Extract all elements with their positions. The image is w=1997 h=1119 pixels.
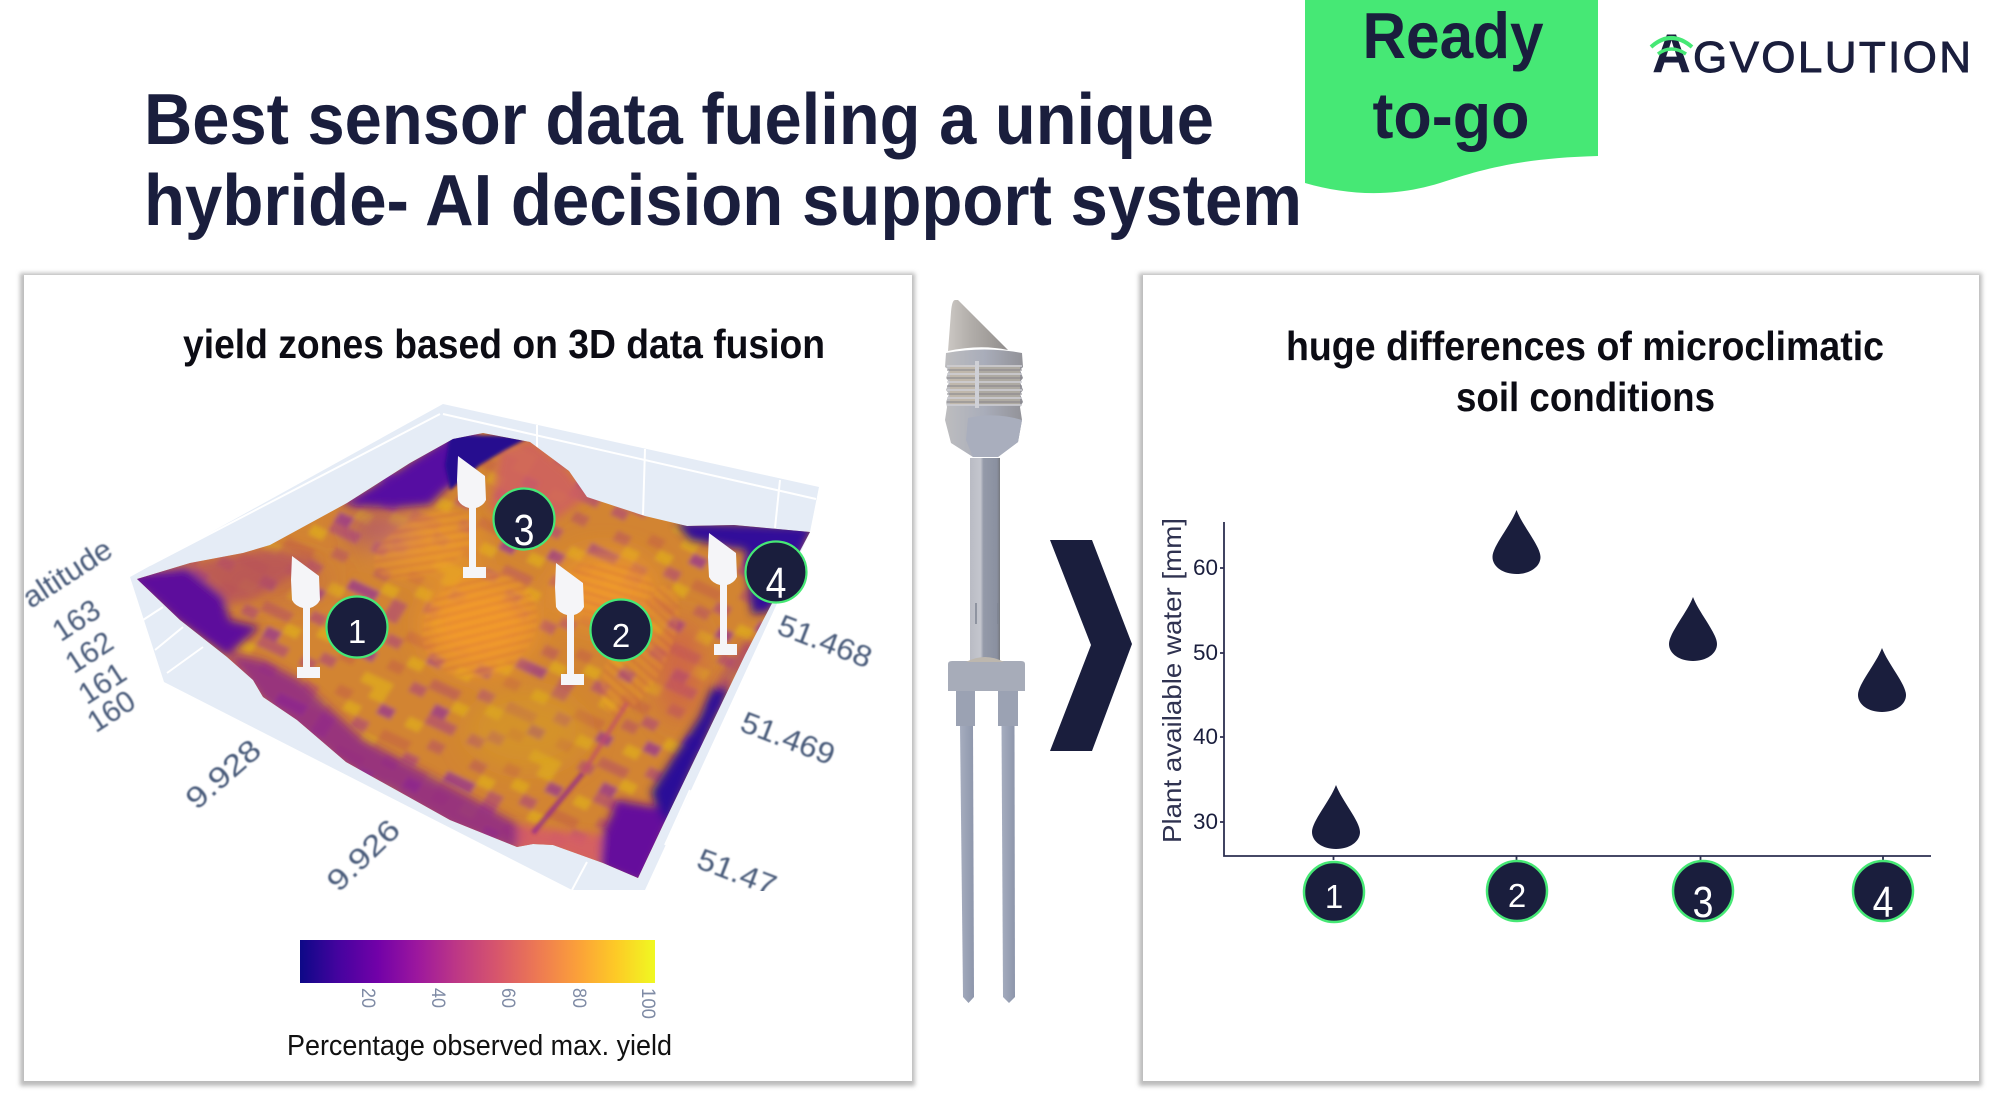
base bar and legs [956,690,1018,726]
sensor marker 2 [555,563,584,685]
marker label 1 [326,596,388,658]
sensor marker 4 [708,533,737,655]
panel heading: soil conditions [1286,323,1884,420]
x label 2: 2 [1508,877,1526,914]
axes [1220,522,1931,860]
axis labels: 51.47 [692,843,781,903]
axis labels: 51.469 [736,706,839,772]
colorbar legend: 80 [568,988,589,1008]
y tick labels: 40 [1193,724,1218,749]
sensor device [945,300,1025,1003]
colorbar legend: Percentage observed max. yield [287,1030,672,1062]
shaft [970,458,1000,662]
marker label 2: 2 [612,617,630,654]
y tick labels [1193,555,1218,834]
logo: Agvolution: A [1652,22,1691,84]
y tick labels: 30 [1193,809,1218,834]
panel: yield zones [17,273,915,1086]
axis labels: 51.468 [773,609,876,675]
logo: Agvolution: GVOLUTION [1693,33,1971,82]
x label 4 [1853,861,1913,927]
axis labels: 9.928 [180,733,268,816]
badge: ready to go [1305,0,1598,193]
title [144,80,1302,241]
axis labels: 160 [82,684,141,739]
x label 3: 3 [1693,877,1713,927]
y axis label: Plant available water [mm] [1157,518,1187,843]
sensor louvres [947,361,1022,408]
sensor bulb [966,415,1022,457]
colorbar legend: 40 [427,988,448,1008]
x label 2 [1487,861,1547,921]
prongs [960,726,974,1003]
marker label 3: 3 [514,505,534,555]
panel heading: soil conditions: huge differences of microclimatic [1286,323,1884,369]
sensor marker 1 [291,556,320,678]
axis labels: 9.926 [321,813,407,898]
water drop 2 [1492,510,1540,574]
yield surface heatmap [137,433,810,878]
arrow: chevron [1050,540,1132,751]
title: hybride- AI decision support system [144,161,1302,241]
marker label 4: 4 [766,558,786,608]
plot walls and floor [130,404,819,890]
axis labels [17,533,876,903]
y tick labels: 50 [1193,640,1218,665]
x label 4: 4 [1873,877,1893,927]
axis labels: 161 [73,656,132,711]
colorbar legend: 20 [357,988,378,1008]
marker label 3 [494,488,554,555]
water drop 4 [1858,648,1906,712]
sensor head body [945,350,1023,457]
colorbar legend [287,940,672,1062]
colorbar legend: 60 [497,988,518,1008]
sensor cone [948,300,1008,351]
axis labels: 163 [47,593,106,648]
y tick labels: 60 [1193,555,1218,580]
x label 1 [1304,862,1364,922]
water drop 3 [1669,597,1717,661]
marker label 2 [590,600,652,660]
axis labels: 162 [60,625,119,680]
water drop 1 [1312,785,1360,849]
axis labels: altitude [17,533,118,615]
x label 1: 1 [1325,878,1343,915]
x label 3 [1673,861,1733,927]
badge: ready to go: to-go [1372,79,1530,152]
chart: 3D yield surface [17,400,876,903]
marker label 4 [746,542,806,608]
title: Best sensor data fueling a unique [144,80,1214,160]
marker label 1: 1 [348,613,366,650]
logo: Agvolution [1651,22,1971,84]
badge: ready to go: Ready [1362,0,1544,72]
panel heading: soil conditions: soil conditions [1456,374,1715,420]
colorbar legend: 100 [637,988,658,1019]
panel: soil conditions [1139,273,1982,1086]
panel heading: yield zones: yield zones based on 3D data fusion [183,321,825,367]
sensor marker 3 [457,456,486,578]
chart: plant available water [1157,510,1931,927]
